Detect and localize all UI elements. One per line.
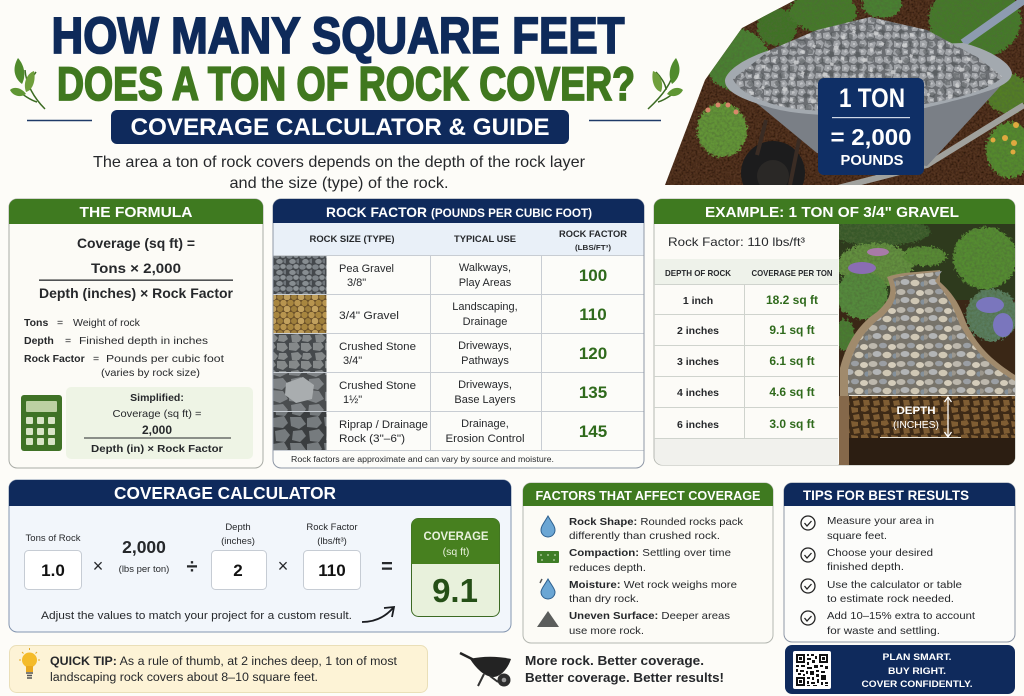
input: depth [212, 522, 266, 590]
tips header: TIPS FOR BEST RESULTS [803, 488, 969, 503]
result: coverage: COVERAGE [424, 529, 488, 543]
factors header: FACTORS THAT AFFECT COVERAGE [536, 488, 761, 503]
simplified formula box: Depth (in) × Rock Factor [91, 443, 223, 455]
row: pea gravel: Pea Gravel [339, 263, 394, 275]
input: depth: Depth [225, 522, 251, 533]
icon: calculator [21, 395, 62, 451]
simplified formula box: 2,000 [142, 423, 172, 437]
input: depth: (inches) [221, 536, 255, 547]
row: pea gravel: 100 [579, 266, 607, 285]
factor: rock shape: Rock Shape: Rounded rocks pack [569, 516, 744, 528]
slogan text: Better coverage. Better results! [525, 671, 724, 685]
column headers [310, 229, 627, 252]
panel: factors that affect coverage [523, 483, 773, 643]
icon: compaction block [537, 551, 559, 563]
panel: tips for best results [784, 483, 1015, 642]
arrow: to result [362, 607, 394, 622]
input: tons of rock: 1.0 [41, 561, 65, 580]
row: pea gravel: Walkways, [459, 262, 511, 274]
row: pea gravel: 3/8" [347, 277, 366, 289]
input: tons of rock: Tons of Rock [26, 533, 81, 544]
panel: coverage calculator [9, 480, 511, 632]
tips list [827, 515, 975, 637]
coverage table: 6 inches [677, 419, 719, 431]
factor: rock shape: differently than crushed rock. [569, 530, 720, 542]
row: crushed stone 3/4: 120 [579, 344, 607, 363]
callout: quick tip [10, 646, 428, 692]
formula header: THE FORMULA [80, 204, 193, 221]
title [52, 7, 635, 110]
input: rock factor [304, 522, 360, 590]
result: coverage [412, 518, 500, 616]
panel: example 1 ton of 3/4 gravel [654, 199, 1018, 465]
multiply operator: × [93, 556, 103, 576]
constant 2,000 [119, 537, 169, 575]
input: tons of rock [24, 533, 82, 590]
input: depth: 2 [233, 561, 243, 580]
simplified formula box: Simplified: [130, 392, 184, 404]
coverage table: 6.1 sq ft [769, 354, 815, 368]
calculator header [9, 480, 511, 506]
row: crushed stone 3/4: Driveways, [458, 340, 512, 352]
input: rock factor: (lbs/ft³) [317, 536, 347, 547]
tips header [784, 483, 1015, 506]
row: 3/4 gravel: 3/4" Gravel [339, 310, 399, 322]
coverage table: 4.6 sq ft [769, 385, 815, 399]
row: crushed stone 3/4 [274, 334, 607, 372]
row: crushed stone 3/4: Crushed Stone [339, 341, 416, 353]
constant 2,000: (lbs per ton) [119, 564, 169, 575]
simplified formula box [66, 387, 253, 459]
table header bar [273, 199, 644, 223]
row: pea gravel [274, 256, 607, 294]
variable definitions: Finished depth in inches [79, 335, 208, 347]
title: HOW MANY SQUARE FEET [52, 7, 624, 64]
row: crushed stone 1 1/2: Crushed Stone [339, 380, 416, 392]
panel: rock factor table [273, 199, 644, 468]
icon: small wheelbarrow [460, 653, 511, 686]
factor: uneven surface: use more rock. [569, 625, 644, 637]
row: 3/4 gravel: Landscaping, [452, 301, 518, 313]
row: riprap: Erosion Control [446, 433, 524, 445]
factor: uneven surface: Uneven Surface: Deeper areas [569, 610, 730, 622]
variable definitions: Depth [24, 335, 54, 347]
coverage table: 9.1 sq ft [769, 323, 815, 337]
subtitle banner: COVERAGE CALCULATOR & GUIDE [130, 114, 550, 141]
variable definitions: Weight of rock [73, 317, 141, 329]
main formula [39, 236, 234, 301]
row: riprap: Rock (3"–6") [339, 433, 405, 445]
row: crushed stone 1 1/2: 135 [579, 383, 607, 402]
row: crushed stone 1 1/2: Driveways, [458, 379, 512, 391]
variable definitions: = [65, 335, 71, 347]
row: crushed stone 3/4: 3/4" [343, 355, 362, 367]
row: 3/4 gravel: 110 [579, 305, 607, 324]
variable definitions: (varies by rock size) [101, 367, 200, 379]
depth label and arrow: DEPTH [896, 405, 936, 417]
photo: gravel garden path with depth cross-section [830, 218, 1018, 465]
tips list: finished depth. [827, 561, 904, 573]
variable definitions: Pounds per cubic foot [106, 353, 224, 365]
row: riprap [274, 412, 607, 450]
title: DOES A TON OF ROCK COVER? [57, 57, 635, 110]
intro text: The area a ton of rock covers depends on the depth of the rock layer [93, 154, 586, 171]
slogan text: More rock. Better coverage. [525, 654, 704, 668]
banner text: BUY RIGHT. [888, 666, 946, 677]
callout: quick tip: QUICK TIP: As a rule of thumb, at 2 inches deep, 1 ton of most [50, 656, 398, 668]
variable definitions: = [57, 317, 63, 329]
tips list: for waste and settling. [827, 625, 940, 637]
divide operator: ÷ [187, 556, 198, 578]
banner text [862, 652, 972, 690]
QR code [793, 651, 831, 689]
multiply operator: × [278, 556, 288, 576]
input: rock factor: 110 [318, 561, 346, 580]
badge: 1 ton equals 2,000 pounds: POUNDS [840, 153, 904, 169]
factor: moisture: than dry rock. [569, 593, 639, 605]
coverage table: 3 inches [677, 356, 719, 368]
variable definitions: Rock Factor [24, 353, 85, 365]
factor: compaction: Compaction: Settling over time [569, 547, 731, 559]
badge: 1 ton equals 2,000 pounds: 1 TON [839, 83, 905, 113]
row: riprap: Riprap / Drainage [339, 419, 428, 431]
column headers: ROCK FACTOR [559, 229, 627, 240]
column headers: ROCK SIZE (TYPE) [310, 234, 394, 245]
banner text: PLAN SMART. [882, 652, 952, 663]
factor: compaction [569, 547, 731, 574]
calculator note: Adjust the values to match your project for a custom result. [41, 610, 352, 622]
main formula: Coverage (sq ft) = [77, 236, 195, 251]
icon: light bulb [19, 648, 40, 678]
intro text: and the size (type) of the rock. [230, 175, 448, 192]
coverage table: 1 inch [683, 295, 713, 307]
coverage table: DEPTH OF ROCK [665, 268, 732, 278]
row: 3/4 gravel [274, 295, 607, 333]
formula header [9, 199, 263, 224]
constant 2,000: 2,000 [122, 537, 166, 557]
row: crushed stone 3/4: Pathways [461, 355, 509, 367]
row: crushed stone 1 1/2: Base Layers [454, 394, 516, 406]
result: coverage: 9.1 [432, 572, 478, 609]
main formula: Tons × 2,000 [91, 261, 181, 276]
factor: moisture: Moisture: Wet rock weighs more [569, 579, 737, 591]
result: coverage: (sq ft) [443, 546, 469, 558]
panel: the formula [9, 199, 263, 468]
row: crushed stone 1 1/2 [274, 373, 607, 411]
factor: rock shape [569, 516, 744, 542]
wheel and legs [741, 120, 805, 185]
coverage table [654, 259, 838, 465]
coverage table: COVERAGE PER TON [752, 268, 832, 278]
slogan text [525, 654, 724, 685]
banner: QR and slogan [785, 645, 1015, 694]
intro text [93, 154, 586, 192]
row: pea gravel: Play Areas [459, 277, 512, 289]
column headers: TYPICAL USE [454, 234, 516, 245]
factors header [523, 483, 773, 506]
factor: uneven surface [569, 610, 730, 637]
factor: compaction: reduces depth. [569, 562, 646, 574]
callout: quick tip: landscaping rock covers about 8–10 square feet. [50, 672, 318, 684]
input: rock factor: Rock Factor [306, 522, 358, 533]
coverage table: 3.0 sq ft [769, 417, 815, 431]
hero photo: wheelbarrow of gravel in garden [665, 0, 1024, 185]
icon: left leaf sprig [10, 58, 45, 109]
tips list: Add 10–15% extra to account [827, 610, 975, 622]
variable definitions: = [93, 353, 99, 365]
row: riprap: 145 [579, 422, 607, 441]
equals operator: = [381, 556, 393, 578]
badge: 1 ton equals 2,000 pounds [818, 78, 924, 175]
tips list: to estimate rock needed. [827, 593, 954, 605]
badge: 1 ton equals 2,000 pounds: = 2,000 [830, 124, 912, 150]
banner text: COVER CONFIDENTLY. [862, 679, 972, 690]
table header bar: (POUNDS PER CUBIC FOOT) [431, 208, 592, 220]
check icons [801, 516, 815, 625]
icon: water drop [541, 516, 555, 537]
factor: moisture [569, 579, 737, 605]
tips list: Measure your area in [827, 515, 934, 527]
icon: rock pile [537, 611, 559, 627]
column headers: (LBS/FT³) [575, 245, 611, 252]
simplified formula box: Coverage (sq ft) = [112, 408, 202, 420]
variable definitions [24, 317, 224, 379]
coverage table: 18.2 sq ft [766, 293, 818, 307]
example header [654, 199, 1015, 224]
calculator header: COVERAGE CALCULATOR [114, 483, 336, 503]
footnote: Rock factors are approximate and can vary by source and moisture. [291, 455, 554, 464]
depth label and arrow: (INCHES) [893, 420, 939, 431]
example header: EXAMPLE: 1 TON OF 3/4" GRAVEL [705, 205, 959, 221]
row: riprap: Drainage, [461, 418, 509, 430]
tips list: Choose your desired [827, 547, 933, 559]
icon: right leaf sprig [648, 58, 683, 109]
table header bar: ROCK FACTOR [326, 204, 427, 220]
rock factor note: Rock Factor: 110 lbs/ft³ [668, 235, 805, 249]
icon: moisture drop [540, 579, 555, 599]
row: crushed stone 1 1/2: 1½" [343, 394, 362, 406]
row: 3/4 gravel: Drainage [463, 316, 507, 328]
tips list: square feet. [827, 530, 887, 542]
depth label and arrow [893, 397, 952, 437]
variable definitions: Tons [24, 317, 48, 329]
main formula: Depth (inches) × Rock Factor [39, 286, 234, 301]
tips list: Use the calculator or table [827, 579, 962, 591]
coverage table: 4 inches [677, 387, 719, 399]
coverage table: 2 inches [677, 325, 719, 337]
